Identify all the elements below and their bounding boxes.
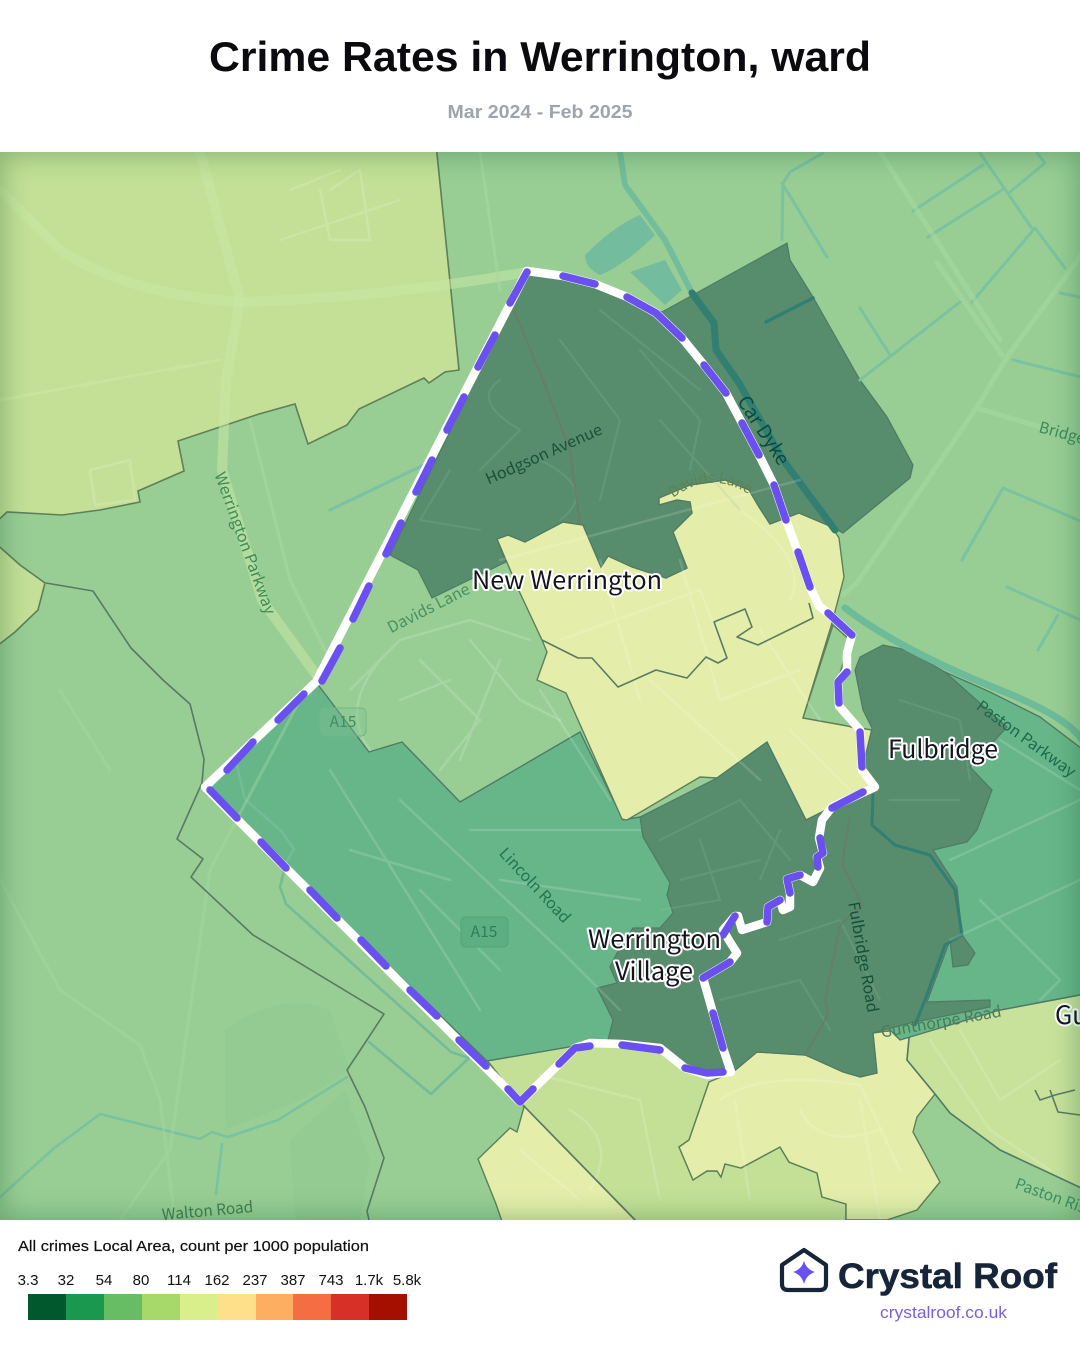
area: north-west lower-crime zone [0, 144, 459, 526]
road label: Hodgson Avenue: Hodgson Avenue [482, 418, 606, 489]
legend tick labels: 54 [96, 1272, 112, 1289]
legend tick labels: 114 [167, 1272, 191, 1289]
title: Crime Rates in Werrington, ward [209, 33, 871, 80]
place label: Fulbridge: Fulbridge [888, 730, 998, 766]
place label: Werrington Village: Werrington [588, 920, 721, 956]
place label: Werrington Village [588, 920, 721, 988]
legend tick labels: 237 [242, 1272, 268, 1289]
legend tick labels: 32 [58, 1272, 74, 1289]
legend tick labels: 743 [318, 1272, 344, 1289]
boundary lines: wards outside [46, 583, 1080, 1220]
roads: major light roads [10, 206, 1059, 1134]
area: south-west pale yellow zone [477, 1104, 636, 1220]
roads: estate streets in dark areas [420, 310, 970, 1030]
road label: Davids Lane (top): Davids Lane [668, 472, 752, 497]
place label: Werrington Village: Village [615, 952, 693, 988]
A15 road badge lower: A15 [471, 920, 497, 942]
legend tick labels: 387 [280, 1272, 306, 1289]
water: dark canal section inside zone [692, 293, 962, 1025]
roads: estate streets in lighter areas [90, 170, 1080, 1220]
legend title: All crimes Local Area, count per 1000 population [18, 1238, 369, 1255]
road label: Werrington Parkway: Werrington Parkway [210, 469, 282, 617]
subtitle: date range: Mar 2024 - Feb 2025 [448, 101, 632, 122]
paths: brown footpaths through dark zones [514, 310, 862, 1055]
legend tick labels: 3.3 [18, 1272, 38, 1289]
road label: Gunthorpe Road: Gunthorpe Road [879, 1000, 1003, 1043]
map base: mid-green areas [0, 152, 1080, 1220]
A15 road badge upper: A15 [330, 710, 356, 732]
legend tick labels: 5.8k [393, 1272, 422, 1289]
area: south-east yellow-green zone [488, 1047, 846, 1220]
A15 road badge upper [330, 708, 366, 736]
area: central pale yellow New Werrington zone [497, 480, 875, 820]
road label: Lincoln Road: Lincoln Road [495, 842, 576, 928]
area: far south-east yellow-green zone [907, 993, 1080, 1192]
small mid-green patch by canal [802, 624, 853, 728]
place label: New Werrington: New Werrington [472, 561, 662, 597]
logo: Crystal Roof [782, 1250, 1057, 1322]
area: south pale yellow zone [679, 1028, 940, 1220]
map edge vignette [0, 152, 1080, 1220]
area: east medium-green zone [888, 671, 1080, 1041]
ponds [585, 215, 682, 305]
ward boundary: white and violet dashed outline [205, 271, 875, 1102]
area: west yellow sliver [0, 540, 45, 650]
woodland shading [225, 1003, 370, 1220]
area: south-west ward medium-green zone [205, 682, 690, 1061]
road label: Walton Road: Walton Road [161, 1195, 254, 1225]
website link: crystalroof.co.uk [880, 1304, 1008, 1322]
logo wordmark: Crystal Roof [838, 1257, 1057, 1296]
icon: house outline with star [782, 1250, 826, 1290]
road label: Davids Lane (left): Davids Lane [383, 577, 473, 638]
water: Car Dyke and field drains [0, 152, 1080, 1197]
road label: Paston Parkway: Paston Parkway [972, 695, 1080, 782]
road label: Fulbridge Road: Fulbridge Road [843, 900, 884, 1014]
A15 road badge lower [461, 917, 508, 947]
legend tick labels: 162 [204, 1272, 230, 1289]
legend tick labels: 80 [133, 1272, 149, 1289]
legend tick labels [18, 1272, 422, 1289]
legend [18, 1238, 422, 1320]
area: south dark-green zone [597, 645, 1007, 1077]
area: north dark-green zone [390, 243, 913, 598]
legend colour scale [28, 1294, 407, 1320]
road label: Car Dyke: Car Dyke [732, 390, 797, 470]
legend tick labels: 1.7k [355, 1272, 384, 1289]
